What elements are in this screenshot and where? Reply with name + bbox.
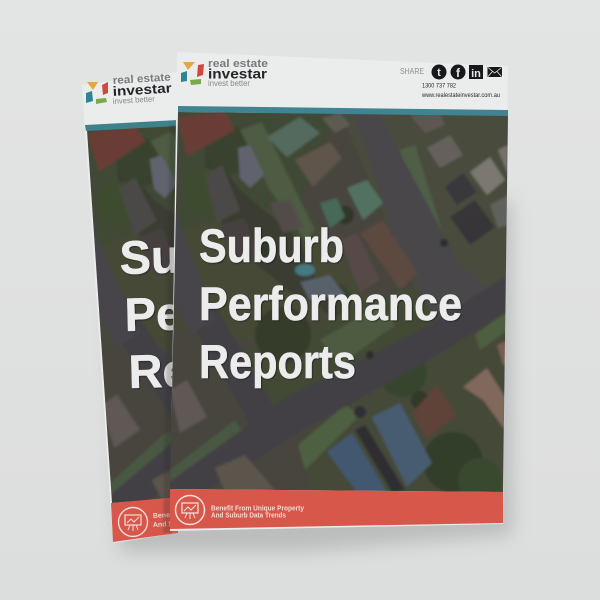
back chart icon — [118, 508, 148, 536]
logo wordmark: invest better — [208, 79, 250, 88]
front booklet — [170, 52, 508, 531]
front cover page — [170, 52, 508, 531]
front cover photo — [170, 112, 508, 492]
share label: SHARE — [400, 67, 424, 76]
mockup scene — [82, 52, 524, 564]
back title: Reports — [128, 340, 307, 398]
band text: And Suburb Data Trends — [211, 510, 286, 520]
icon: facebook — [450, 64, 466, 80]
back cover page — [82, 72, 178, 543]
phone number: 1300 737 782 — [422, 82, 456, 90]
back logo: real estate — [112, 71, 171, 87]
back booklet — [82, 72, 454, 543]
logo wordmark: investar — [208, 66, 268, 82]
title — [199, 219, 462, 388]
band text: Benefit From Unique Property — [211, 504, 304, 512]
icon: mail — [488, 67, 502, 77]
back teal bar — [85, 120, 178, 131]
back title: Performance — [124, 280, 413, 341]
back band text: And Suburb — [153, 520, 193, 529]
logo mark — [181, 62, 204, 85]
icon: presentation chart — [176, 496, 204, 524]
back title — [119, 227, 413, 398]
back red band — [111, 497, 178, 542]
back cover photo — [87, 126, 176, 503]
front shadow on back — [163, 125, 177, 533]
band text — [211, 504, 304, 520]
back band text: Benefit From — [153, 511, 196, 520]
icon: twitter — [432, 64, 446, 80]
back title: Suburb — [119, 227, 285, 284]
website: www.realestateinvestar.com.au — [421, 92, 500, 99]
front teal bar — [178, 106, 508, 116]
title: Performance — [199, 277, 462, 330]
title: Suburb — [199, 219, 344, 272]
logo wordmark: real estate — [208, 58, 268, 70]
back band text — [153, 511, 196, 529]
icon: linkedin: in — [471, 68, 481, 80]
front red band — [170, 489, 503, 529]
back logo: investar — [112, 80, 173, 99]
icon: linkedin — [469, 65, 483, 80]
shadow — [110, 200, 512, 552]
back logo — [86, 71, 173, 106]
icon: twitter: t — [437, 67, 441, 79]
logo wordmark — [208, 58, 268, 88]
front logo — [181, 58, 268, 88]
icon: facebook: f — [456, 66, 461, 80]
back logo: invest better — [113, 94, 155, 106]
title: Reports — [199, 335, 356, 388]
